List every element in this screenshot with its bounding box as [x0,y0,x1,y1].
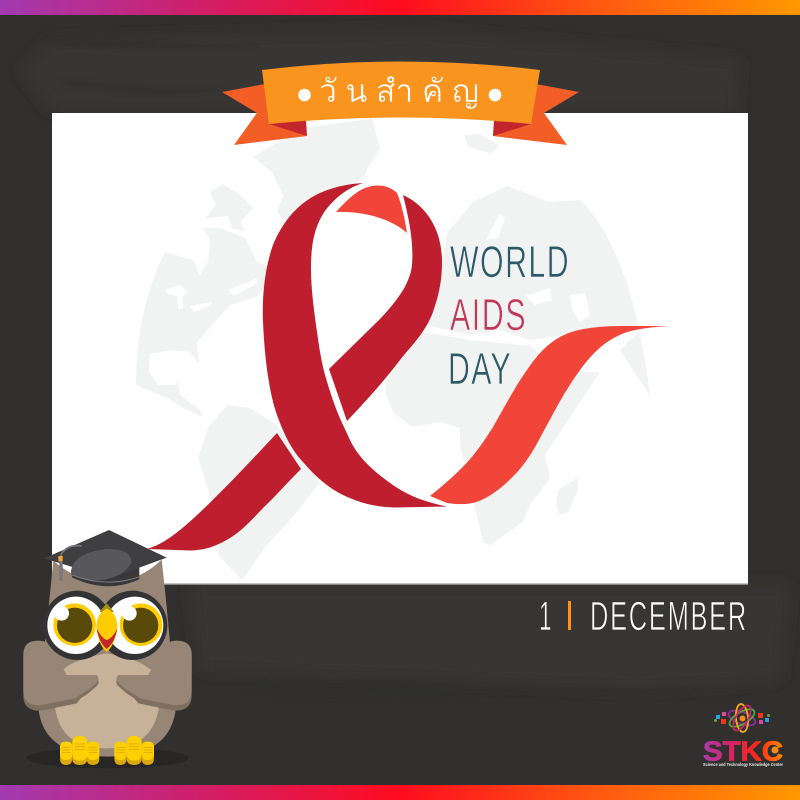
world map in background [136,118,650,580]
owl body [38,559,176,757]
bottom gradient bar [0,785,800,800]
owl glasses rings [43,591,167,660]
Arctic islands [205,184,253,232]
ribbon right tail [430,326,669,504]
Madagascar [556,478,578,515]
day number: 1 [539,594,552,640]
owl toes [60,736,154,765]
banner title: วันสำคัญ [319,73,479,109]
owl left wing [23,641,99,711]
owl left eye [47,597,105,654]
logo atom icon [714,703,770,733]
ribbon right loop band [329,195,442,421]
white panel [52,113,748,584]
North America lakes [165,278,258,312]
Svalbard [464,134,500,153]
North America [136,228,272,417]
banner left tail [222,84,307,145]
owl mascot [23,530,192,768]
Greenland [253,118,380,222]
Eurasia [425,186,650,395]
ribbon top fold [336,185,407,233]
banner left dot [298,89,311,101]
banner left fold [269,120,307,136]
orange divider [568,601,571,630]
owl belly [55,653,159,748]
owl shadow [27,748,189,768]
top gradient bar [0,0,800,15]
owl beak [96,603,117,652]
WORLD AIDS DAY ribbon [147,183,669,550]
AIDS: AIDS [450,291,527,341]
logo tagline: Science and Technology Knowledge Center [703,762,783,767]
owl right eye [106,597,163,654]
DAY: DAY [448,345,512,395]
banner body [262,62,540,124]
banner: วันสำคัญ [222,62,579,145]
logo C dot [772,746,778,754]
banner right fold [493,120,531,136]
heading: WORLD AIDS DAY [448,238,570,395]
South America [198,405,320,580]
Africa [385,332,600,545]
banner right tail [493,84,579,145]
ribbon main band [263,183,447,508]
graduation cap [44,530,167,586]
banner right dot [489,89,501,101]
owl right wing [116,641,192,711]
month: DECEMBER [590,594,748,640]
STKC logo [703,703,783,767]
ribbon lower-left tail [147,433,301,550]
logo wordmark: STKC [703,736,783,766]
WORLD: WORLD [450,238,570,288]
Asia inland seas [486,214,590,322]
date: 1 | DECEMBER [539,594,748,640]
